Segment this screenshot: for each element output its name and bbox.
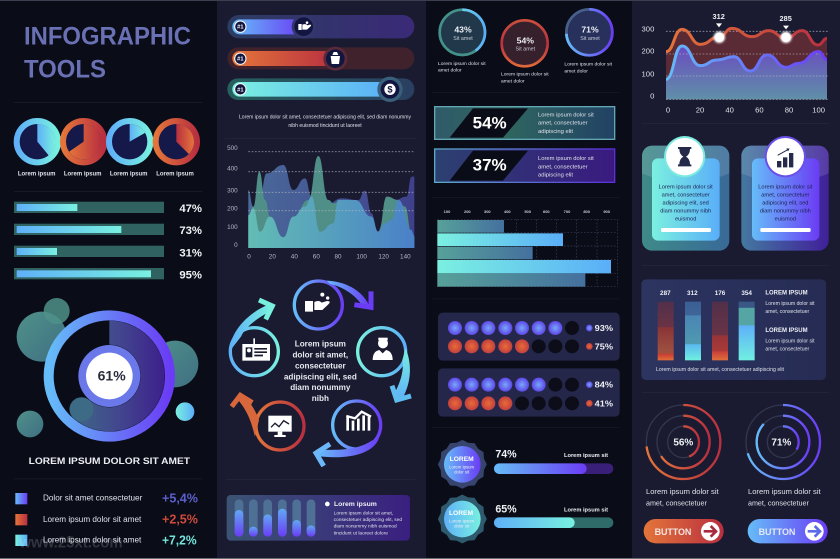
cycle centre text: consectetuer bbox=[295, 361, 347, 370]
badge 2 progress: Lorem ipsum sit bbox=[564, 507, 608, 513]
area chart: 20 bbox=[269, 254, 276, 261]
title bbox=[24, 23, 191, 83]
stat box 54%: adipiscing elit bbox=[538, 129, 573, 135]
column 4: line chart and cards bbox=[642, 12, 829, 265]
title: TOOLS bbox=[24, 55, 106, 83]
card: hourglass: adipiscing elit, sed bbox=[663, 201, 709, 207]
badge 1: LOREM bbox=[450, 456, 474, 463]
button: orange bbox=[644, 519, 724, 543]
card: hourglass bbox=[642, 136, 729, 251]
radial chart 56%: 56% bbox=[673, 438, 693, 449]
area chart: 100 bbox=[227, 224, 238, 231]
area chart: 100 bbox=[356, 254, 367, 261]
watermark: www.25xt.com bbox=[18, 534, 123, 551]
panel: stacked bars: LOREM IPSUM bbox=[765, 291, 808, 297]
ring stat 3 bbox=[566, 9, 612, 55]
stat box 37%: Lorem ipsum dolor sit bbox=[538, 156, 594, 162]
card: bar growth: euismod bbox=[775, 217, 796, 223]
step: top bbox=[294, 281, 371, 329]
area chart: 300 bbox=[227, 187, 238, 194]
badge 1: dolor sit bbox=[454, 470, 470, 475]
card: bar growth bbox=[741, 136, 829, 251]
slider 3: $ bbox=[387, 85, 393, 95]
radial captions: amet, consectetuer bbox=[646, 499, 707, 507]
panel: dot matrix 1: 75% bbox=[595, 341, 613, 351]
radial captions: Lorem ipsum dolor sit bbox=[748, 488, 821, 496]
ring captions: amet dolor bbox=[564, 68, 588, 74]
ring stat 2 bbox=[502, 20, 548, 66]
panel: stacked bars: Lorem ipsum dolor sit bbox=[765, 301, 815, 307]
panel: stacked bars: 287 bbox=[660, 290, 671, 297]
horizontal bar chart: 900 bbox=[603, 209, 611, 214]
panel: stacked bars bbox=[641, 279, 826, 380]
horizontal bar chart: 600 bbox=[543, 209, 550, 214]
panel: dot matrix 1 bbox=[438, 313, 620, 361]
pie labels bbox=[18, 171, 194, 177]
area line chart: 60 bbox=[755, 106, 764, 115]
radial chart 71% bbox=[746, 405, 820, 479]
stat box 37% bbox=[435, 149, 615, 182]
card: bar growth: adipiscing elit, sed bbox=[762, 201, 808, 207]
step: left bbox=[229, 300, 278, 376]
horizontal bar chart: 400 bbox=[504, 209, 511, 214]
ring captions: Lorem ipsum dolor sit bbox=[438, 61, 486, 67]
area chart: 200 bbox=[227, 205, 238, 212]
card: hourglass: diam nonummy nibh bbox=[660, 209, 711, 215]
column 4: stacked bars, radial charts, buttons bbox=[641, 279, 829, 543]
background circles bbox=[17, 298, 198, 437]
badge 2 progress: 65% bbox=[495, 503, 517, 515]
legend: +7,2% bbox=[162, 533, 197, 547]
ring stat 1 bbox=[440, 10, 485, 55]
panel: dot matrix 2 bbox=[438, 368, 620, 417]
ring stat 3: 71% bbox=[581, 25, 599, 35]
area chart: 60 bbox=[313, 254, 320, 261]
badge 2 progress bbox=[494, 503, 613, 528]
progress bars: 31% bbox=[179, 247, 202, 259]
horizontal bar chart: 700 bbox=[564, 209, 571, 214]
panel: dot matrix 2: 41% bbox=[595, 398, 613, 408]
panel: stacked bars: Lorem ipsum dolor sit bbox=[765, 338, 815, 344]
area line chart: 80 bbox=[785, 106, 793, 115]
slider 3: #1 bbox=[237, 87, 243, 93]
area line chart: 0 bbox=[666, 106, 670, 115]
cycle centre text: Lorem ipsum bbox=[295, 340, 346, 349]
card: bar growth: amet, consectetuer bbox=[761, 193, 809, 199]
panel: vertical bars with text: tincidunt ut laoreet dolore bbox=[334, 530, 388, 536]
horizontal bar chart: 100 bbox=[444, 209, 451, 214]
donut caption: LOREM IPSUM DOLOR SIT AMET bbox=[29, 456, 191, 466]
panel: stacked bars: amet, consectetuer bbox=[765, 309, 809, 315]
ring captions: amet dolor bbox=[438, 68, 462, 74]
stat box 37%: amet, consectetuer bbox=[538, 164, 588, 170]
card: bar growth: diam nonummy nibh bbox=[760, 209, 811, 215]
pie labels: Lorem ipsum bbox=[156, 171, 194, 177]
radial captions: amet, consectetuer bbox=[748, 499, 809, 507]
button: blue bbox=[748, 519, 828, 543]
area chart: 140 bbox=[400, 254, 411, 261]
panel: vertical bars with text: Lorem ipsum dolor sit amet, bbox=[334, 510, 393, 516]
legend: Dolor sit amet consectetuer bbox=[43, 494, 143, 503]
area line chart: 0 bbox=[650, 91, 654, 100]
legend: +2,5% bbox=[162, 512, 198, 526]
area chart: 0 bbox=[247, 254, 251, 261]
ring stat 1: Sit amet bbox=[453, 36, 473, 42]
column 3: rings, stat boxes, horizontal bars bbox=[432, 9, 619, 299]
progress bars bbox=[14, 202, 202, 281]
pie 3 bbox=[109, 121, 150, 162]
panel: stacked bars: LOREM IPSUM bbox=[765, 328, 808, 334]
column 2: sliders and area chart bbox=[225, 15, 416, 261]
slider caption: nibh euismod tincidunt ut laoreet bbox=[288, 123, 362, 129]
badge 1 progress: 74% bbox=[495, 449, 517, 461]
area chart: 500 bbox=[227, 145, 238, 152]
ring stat 1: 43% bbox=[454, 25, 472, 35]
panel: vertical bars with text bbox=[227, 495, 410, 541]
horizontal bar chart bbox=[437, 209, 617, 287]
progress bars: 95% bbox=[179, 269, 202, 281]
donut chart bbox=[49, 315, 170, 437]
pie labels: Lorem ipsum bbox=[110, 171, 147, 177]
panel: stacked bars: amet, consectetuer bbox=[765, 346, 809, 352]
legend: +5,4% bbox=[162, 491, 198, 505]
title: INFOGRAPHIC bbox=[24, 23, 191, 51]
badge 2 bbox=[439, 496, 486, 542]
cycle centre text: nibh bbox=[312, 394, 329, 403]
panel: stacked bars: Lorem ipsum dolor sit amet, consectetuer adipiscing elit bbox=[656, 367, 785, 373]
column 2: cycle diagram and bar panel bbox=[227, 281, 415, 541]
area line chart: 200 bbox=[642, 47, 654, 56]
panel: dot matrix 2: 84% bbox=[595, 380, 613, 390]
card: bar growth: Lorem ipsum dolor sit bbox=[758, 185, 813, 191]
pie 1 bbox=[17, 121, 58, 162]
slider 3 bbox=[227, 77, 414, 102]
ring captions bbox=[438, 61, 613, 84]
badge 2: LOREM bbox=[449, 510, 473, 517]
horizontal bar chart: 800 bbox=[583, 209, 591, 214]
cycle centre text: adipiscing elit, sed bbox=[284, 372, 357, 381]
radial chart 56% bbox=[646, 405, 720, 479]
donut chart: 61% bbox=[98, 368, 126, 384]
panel: stacked bars: 354 bbox=[741, 290, 752, 297]
slider 1 bbox=[227, 15, 414, 39]
area line chart: 20 bbox=[696, 106, 704, 115]
ring stat 2: Sit amet bbox=[516, 47, 536, 53]
button: blue: BUTTON bbox=[759, 527, 795, 537]
pie labels: Lorem ipsum bbox=[64, 171, 101, 177]
area line chart: 312 bbox=[713, 12, 725, 21]
badge 1 bbox=[439, 441, 486, 488]
pie charts row bbox=[17, 121, 197, 177]
panel: dot matrix 1: 93% bbox=[595, 323, 613, 333]
badge 2: dolor sit bbox=[454, 524, 470, 529]
radial captions: Lorem ipsum dolor sit bbox=[646, 488, 719, 496]
panel: vertical bars with text: Lorem ipsum bbox=[334, 501, 377, 508]
area line chart: 300 bbox=[642, 24, 654, 33]
cycle diagram bbox=[229, 281, 411, 466]
slider caption bbox=[239, 114, 411, 129]
panel: stacked bars: 176 bbox=[715, 290, 726, 297]
icon: hourglass bbox=[678, 147, 691, 166]
legend: Lorem ipsum dolor sit amet bbox=[43, 536, 142, 545]
stat box 54% bbox=[435, 107, 615, 139]
progress bars: 73% bbox=[179, 225, 202, 237]
horizontal bar chart: 500 bbox=[524, 209, 532, 214]
slider 2: #1 bbox=[237, 57, 243, 63]
stat box 54%: 54% bbox=[473, 113, 507, 132]
icon: hand bbox=[298, 21, 311, 30]
column 3: dot matrices and badges bbox=[432, 313, 620, 542]
badge 2: Lorem ipsum bbox=[449, 518, 475, 523]
badge 1 progress: Lorem ipsum sit bbox=[564, 453, 608, 459]
icon: cup bbox=[331, 52, 340, 64]
horizontal bar chart: 300 bbox=[484, 209, 491, 214]
area chart: 120 bbox=[378, 254, 389, 261]
card: hourglass: Lorem ipsum dolor sit bbox=[659, 185, 713, 191]
area line chart: 40 bbox=[725, 106, 734, 115]
ring stat 3: Sit amet bbox=[580, 36, 600, 42]
radial chart 71%: 71% bbox=[771, 438, 791, 449]
ring captions: amet dolor bbox=[501, 78, 525, 84]
pie 2 bbox=[63, 121, 104, 162]
stat box 54%: amet, consectetuer bbox=[538, 121, 588, 127]
cycle centre text bbox=[284, 340, 357, 403]
step: bottom right bbox=[316, 401, 381, 466]
area chart bbox=[227, 145, 414, 261]
area chart: 400 bbox=[227, 166, 238, 173]
slider caption: Lorem ipsum dolor sit amet, consectetuer adipiscing elit, sed diam nonummy bbox=[239, 114, 411, 120]
area line chart: 285 bbox=[780, 14, 792, 23]
horizontal bar chart: 200 bbox=[464, 209, 471, 214]
ring captions: Lorem ipsum dolor sit bbox=[564, 62, 613, 68]
legend: Lorem ipsum dolor sit amet bbox=[43, 515, 142, 524]
area chart: 80 bbox=[334, 254, 342, 261]
slider 1: #1 bbox=[237, 25, 243, 31]
pie labels: Lorem ipsum bbox=[18, 171, 55, 177]
area chart: 40 bbox=[291, 254, 298, 261]
panel: stacked bars: 312 bbox=[687, 290, 698, 297]
cycle centre text: dolor sit amet, bbox=[292, 350, 348, 359]
area line chart: 100 bbox=[642, 69, 654, 78]
stat box 37%: 37% bbox=[473, 156, 507, 175]
panel: vertical bars with text: diam nonummy nibh euismod bbox=[334, 524, 397, 530]
progress bars: 47% bbox=[179, 203, 202, 215]
ring captions: Lorem ipsum dolor sit bbox=[501, 72, 549, 78]
radial captions bbox=[646, 488, 821, 507]
badge 1 progress bbox=[494, 449, 613, 474]
stat box 37%: adipiscing elit bbox=[538, 173, 573, 179]
area line chart bbox=[642, 12, 828, 115]
badge 1: Lorem ipsum bbox=[449, 464, 475, 469]
legend bbox=[15, 491, 198, 547]
area line chart: 100 bbox=[812, 106, 825, 115]
area chart: 0 bbox=[234, 242, 238, 249]
pie 4 bbox=[156, 121, 197, 162]
icon: growth bars bbox=[777, 153, 793, 167]
button: orange: BUTTON bbox=[655, 527, 691, 537]
card: hourglass: euismod bbox=[675, 217, 696, 223]
panel: vertical bars with text: consectetuer adipiscing elit, sed bbox=[334, 517, 402, 523]
card: hourglass: amet, consectetuer bbox=[662, 193, 710, 199]
step: right bbox=[358, 328, 411, 401]
slider 2 bbox=[227, 47, 414, 71]
column 1: title, pies, progress bars bbox=[14, 23, 203, 281]
stat box 54%: Lorem ipsum dolor sit bbox=[538, 112, 594, 118]
ring stat 2: 54% bbox=[517, 35, 534, 45]
cycle centre text: diam nonummy bbox=[290, 383, 351, 392]
step: bottom left bbox=[232, 395, 304, 450]
column 1: donut and legend bbox=[14, 298, 203, 551]
